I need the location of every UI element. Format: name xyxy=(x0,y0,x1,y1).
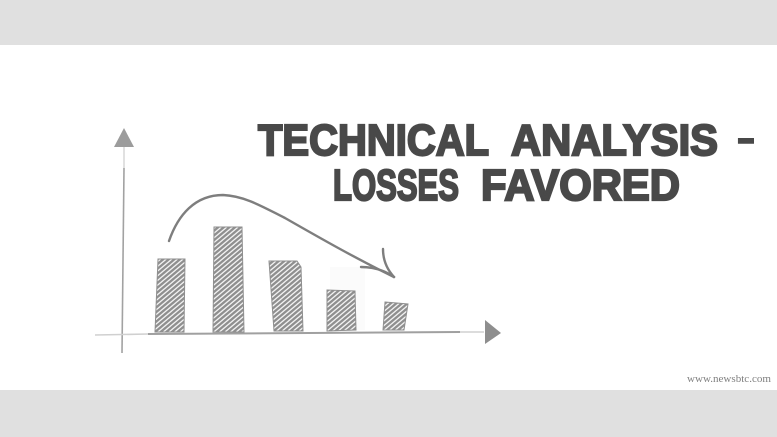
bar 5 xyxy=(383,302,408,330)
faint paste patch behind bar xyxy=(330,267,365,330)
top band xyxy=(0,0,777,45)
title word: favored: FAVORED xyxy=(481,161,680,210)
title dash: - xyxy=(736,113,756,162)
bottom band xyxy=(0,390,777,437)
bar chart xyxy=(155,227,408,332)
source url: www.newsbtc.com xyxy=(687,374,771,385)
bar 2 xyxy=(213,227,244,332)
horizontal axis xyxy=(95,320,501,344)
title word: analysis: ANALYSIS xyxy=(511,116,718,165)
bar 4 xyxy=(327,290,356,331)
bar 3 xyxy=(269,261,303,331)
title line 2: LOSSES xyxy=(333,161,459,210)
bar 1 xyxy=(155,259,185,332)
title xyxy=(258,113,756,210)
title line 1: TECHNICAL xyxy=(258,116,489,165)
downward trend arrow xyxy=(169,195,394,277)
vertical axis xyxy=(114,128,134,353)
